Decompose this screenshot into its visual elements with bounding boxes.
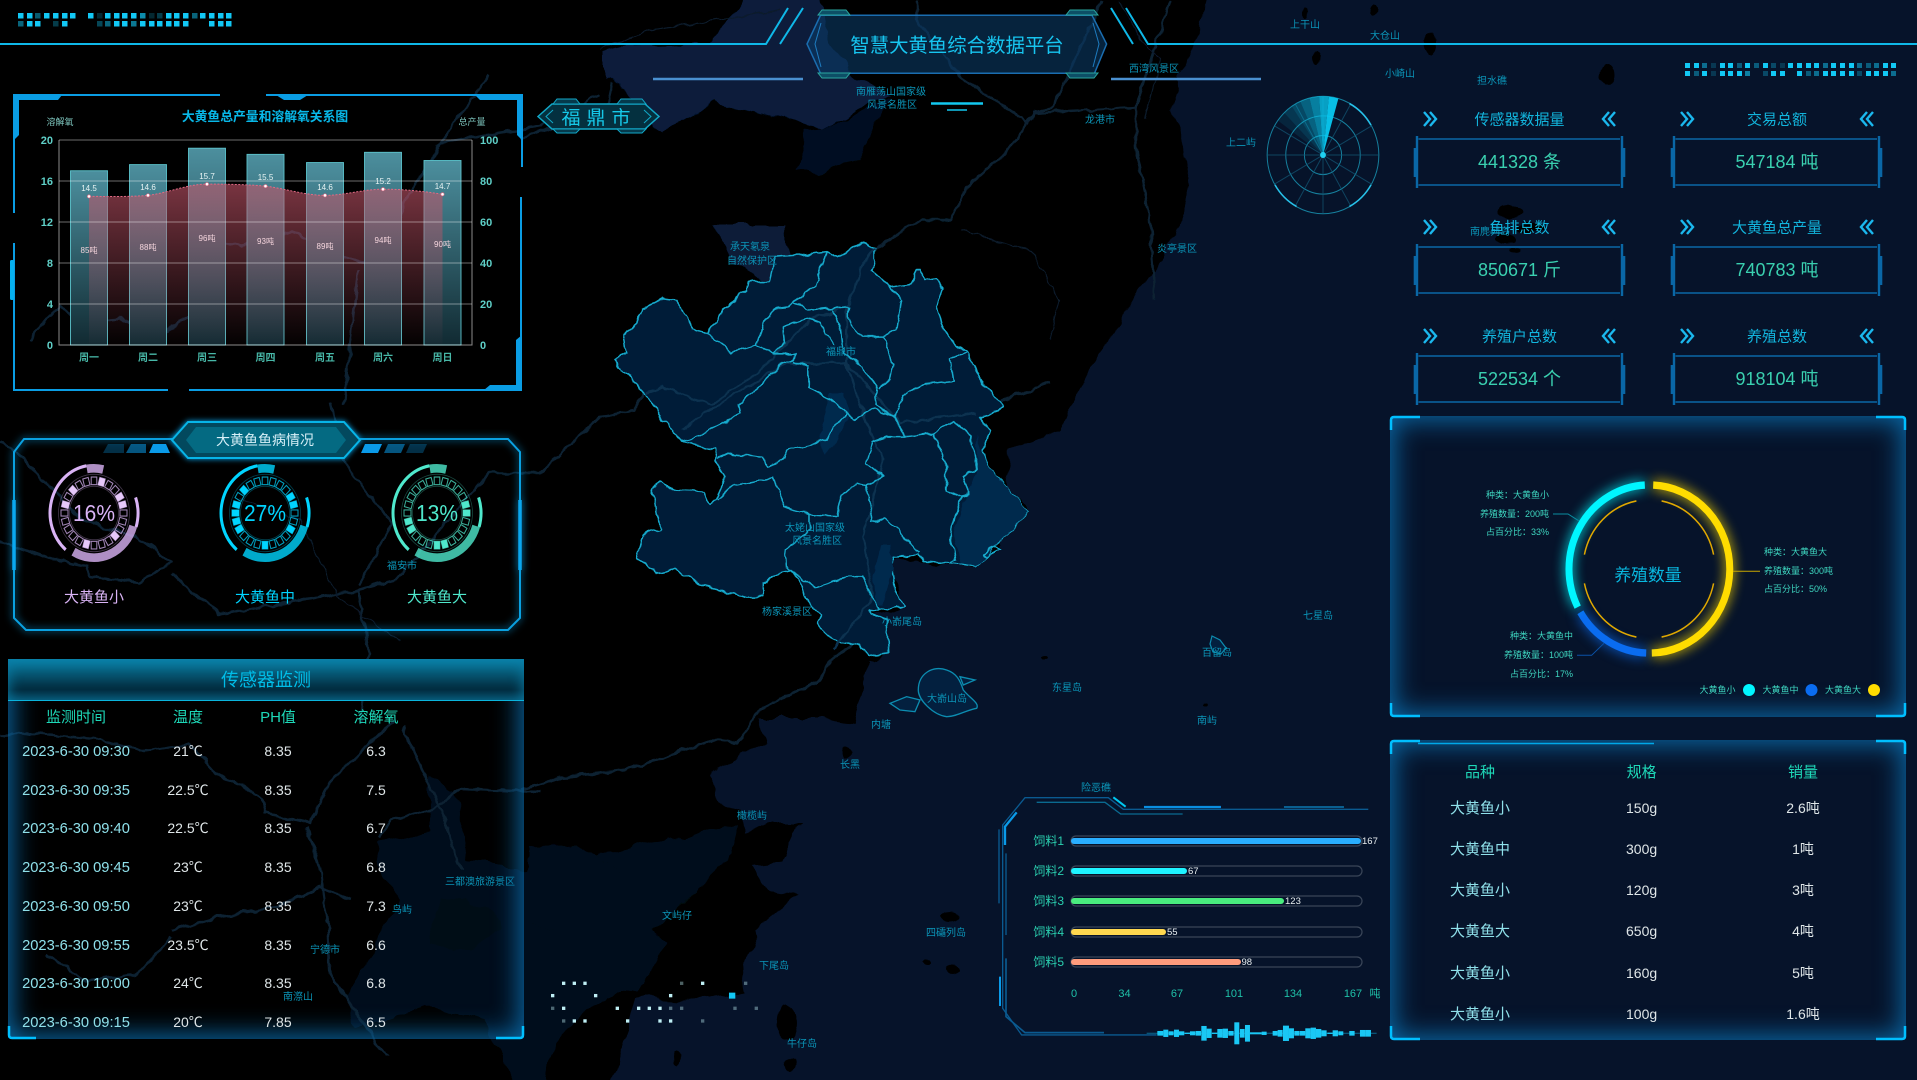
gauge: large fish 13%: 13% bbox=[416, 500, 458, 526]
data columns: 21℃ bbox=[173, 743, 203, 759]
map place labels: 牛仔岛 bbox=[787, 1037, 817, 1050]
callouts: 养殖数量：100吨 bbox=[1504, 649, 1573, 660]
left axis: 8 bbox=[47, 258, 53, 270]
data columns: 8.35 bbox=[264, 898, 292, 914]
map place labels: 四礵列岛 bbox=[926, 926, 966, 939]
bar names: 饲料1 bbox=[1033, 834, 1064, 848]
dissolved oxygen area line bbox=[87, 182, 444, 345]
card: total farmed bbox=[1672, 328, 1881, 405]
data columns: 20℃ bbox=[173, 1014, 203, 1030]
time column: 2023-6-30 09:35 bbox=[22, 783, 130, 799]
city tag: Fuding bbox=[537, 98, 660, 134]
column headers: 规格 bbox=[1627, 764, 1657, 781]
spec and sales columns: 1.6吨 bbox=[1786, 1006, 1820, 1022]
left axis: 4 bbox=[47, 299, 54, 311]
callouts: 占百分比：33% bbox=[1486, 526, 1549, 537]
day labels: 周日 bbox=[432, 352, 452, 364]
spec and sales columns bbox=[1626, 800, 1820, 1022]
map place labels: 小嵛尾岛 bbox=[882, 615, 922, 628]
map place labels: 三都澳旅游景区 bbox=[445, 875, 515, 888]
data columns: 23℃ bbox=[173, 898, 203, 914]
bar names bbox=[1033, 834, 1064, 969]
map place labels: 上干山 bbox=[1290, 19, 1320, 31]
map place labels: 东星岛 bbox=[1052, 681, 1082, 694]
leader lines bbox=[1553, 514, 1760, 655]
map place labels: 太姥山国家级 bbox=[785, 521, 845, 534]
right axis: 80 bbox=[480, 176, 492, 188]
column headers: 溶解氧 bbox=[353, 709, 399, 726]
spec and sales columns: 5吨 bbox=[1792, 965, 1814, 981]
map place labels: 西湾风景区 bbox=[1129, 62, 1179, 75]
card: total fish discharge: 850671 斤 bbox=[1478, 260, 1561, 280]
bar names: 饲料2 bbox=[1033, 864, 1064, 878]
right axis: 40 bbox=[480, 258, 492, 270]
bar tracks bbox=[1071, 836, 1362, 967]
map place labels: 担水礁 bbox=[1477, 74, 1507, 87]
panel: yield vs dissolved oxygen chart bbox=[10, 94, 523, 391]
yield value labels: 90吨 bbox=[434, 239, 451, 249]
map place labels: 宁德市 bbox=[310, 943, 340, 956]
donut chart bbox=[1569, 485, 1730, 653]
card: total farmed: 918104 吨 bbox=[1735, 369, 1819, 389]
card: total farmers: 522534 个 bbox=[1478, 369, 1561, 389]
data columns: 6.8 bbox=[366, 859, 386, 875]
day labels: 周二 bbox=[138, 352, 158, 364]
data columns: 7.3 bbox=[366, 898, 386, 914]
time column: 2023-6-30 09:40 bbox=[22, 821, 130, 837]
panel title badge: 大黄鱼鱼病情况 bbox=[216, 432, 314, 448]
yield value labels: 89吨 bbox=[317, 241, 333, 251]
variety column: 大黄鱼小 bbox=[1450, 1005, 1510, 1023]
data columns: 6.5 bbox=[366, 1014, 386, 1030]
card: sensor data volume: 441328 条 bbox=[1478, 152, 1561, 172]
time column: 2023-6-30 09:50 bbox=[22, 899, 130, 915]
day labels: 周三 bbox=[197, 352, 217, 364]
left axis: 16 bbox=[41, 176, 53, 188]
map place labels: 大仓山 bbox=[1370, 29, 1400, 42]
map place labels: 内塘 bbox=[871, 718, 891, 731]
panel: farming quantity donut bbox=[1390, 416, 1906, 717]
radar widget bbox=[1266, 96, 1380, 214]
callouts: 占百分比：17% bbox=[1510, 668, 1573, 679]
data columns: 6.8 bbox=[366, 975, 386, 991]
map place labels: 承天氡泉 bbox=[730, 240, 770, 253]
left axis: 0 bbox=[47, 340, 53, 352]
yield value labels: 88吨 bbox=[140, 242, 156, 252]
day labels: 周一 bbox=[79, 352, 99, 364]
column headers: 温度 bbox=[173, 709, 203, 726]
callouts: 种类：大黄鱼大 bbox=[1764, 546, 1827, 557]
panel: fish disease status bbox=[6, 416, 528, 638]
panel: sensor monitoring table: 传感器监测 bbox=[221, 670, 311, 690]
spec and sales columns: 4吨 bbox=[1792, 923, 1814, 939]
value axis: 0 bbox=[1071, 988, 1077, 1000]
day labels: 周六 bbox=[373, 351, 393, 364]
variety column: 大黄鱼大 bbox=[1450, 922, 1510, 940]
left axis: 20 bbox=[41, 135, 53, 147]
column headers bbox=[1465, 764, 1818, 781]
bars bbox=[1071, 838, 1361, 965]
time column bbox=[22, 744, 130, 1031]
callouts: 种类：大黄鱼小 bbox=[1486, 489, 1549, 500]
axis titles: 溶解氧 bbox=[46, 116, 74, 127]
left axis bbox=[41, 135, 54, 352]
card: total farmers: 养殖户总数 bbox=[1482, 328, 1557, 346]
value axis: 67 bbox=[1171, 988, 1183, 1000]
bar names: 饲料3 bbox=[1033, 894, 1064, 908]
value axis bbox=[1071, 987, 1380, 1000]
legend bbox=[1699, 684, 1880, 696]
bar names: 饲料4 bbox=[1033, 925, 1064, 939]
value axis: 吨 bbox=[1370, 987, 1380, 1000]
card: total yield bbox=[1672, 218, 1881, 296]
title plate bbox=[807, 10, 1107, 78]
card: total yield: 大黄鱼总产量 bbox=[1732, 218, 1822, 236]
legend: 大黄鱼大 bbox=[1825, 684, 1861, 695]
card: total transactions: 交易总额 bbox=[1747, 110, 1807, 128]
bar names: 饲料5 bbox=[1033, 955, 1064, 969]
land and sea shapes bbox=[0, 0, 1208, 1080]
gauge label: medium fish: 大黄鱼中 bbox=[235, 588, 295, 606]
map place labels: 龙港市 bbox=[1085, 113, 1115, 126]
card: total yield: 740783 吨 bbox=[1735, 260, 1819, 280]
yield value labels: 96吨 bbox=[199, 233, 215, 243]
corner marks bbox=[1391, 417, 1905, 716]
sound wave bbox=[1147, 1022, 1377, 1044]
card: sensor data volume: 传感器数据量 bbox=[1474, 112, 1565, 128]
left axis: 12 bbox=[41, 217, 53, 229]
map place labels: 南屿 bbox=[1197, 714, 1217, 727]
spec and sales columns: 300g bbox=[1626, 841, 1657, 857]
panel frame bbox=[14, 439, 520, 630]
small islands bbox=[673, 4, 1615, 1071]
map place labels: 自然保护区 bbox=[727, 254, 777, 267]
chart frame bbox=[10, 95, 522, 390]
bar values: 98 bbox=[1242, 957, 1252, 968]
gauge: medium fish 27%: 27% bbox=[244, 500, 286, 526]
oxygen value labels: 15.5 bbox=[258, 173, 274, 182]
map place labels: 长黑 bbox=[840, 759, 860, 771]
callouts: 养殖数量：300吨 bbox=[1764, 565, 1833, 576]
right axis bbox=[480, 135, 498, 352]
data columns: 7.85 bbox=[264, 1014, 292, 1030]
axis titles bbox=[46, 116, 486, 127]
data columns: 22.5℃ bbox=[167, 820, 209, 836]
data columns: 8.35 bbox=[264, 743, 292, 759]
variety column: 大黄鱼小 bbox=[1450, 964, 1510, 982]
map place labels: 福鼎市 bbox=[826, 345, 856, 358]
islands with outlines bbox=[890, 669, 977, 717]
data columns: 8.35 bbox=[264, 820, 292, 836]
day labels bbox=[79, 351, 452, 364]
map place labels bbox=[283, 19, 1510, 1050]
gauge: small fish 16% bbox=[50, 466, 138, 558]
variety column: 大黄鱼中 bbox=[1450, 840, 1510, 858]
map place labels: 文屿仔 bbox=[662, 909, 692, 922]
bar values: 67 bbox=[1188, 866, 1199, 877]
donut center label: 养殖数量 bbox=[1614, 566, 1682, 585]
spec and sales columns: 120g bbox=[1626, 882, 1657, 898]
map place labels: 百留岛 bbox=[1202, 646, 1232, 659]
data columns: 23℃ bbox=[173, 859, 203, 875]
card: total fish discharge bbox=[1415, 218, 1624, 296]
data columns: 8.35 bbox=[264, 782, 292, 798]
gauge: medium fish 27% bbox=[221, 466, 309, 558]
map place labels: 杨家溪景区 bbox=[762, 605, 812, 618]
data columns: 6.3 bbox=[366, 743, 386, 759]
day labels: 周四 bbox=[256, 352, 276, 364]
header lines bbox=[0, 8, 1917, 44]
panel: sensor monitoring table bbox=[8, 659, 524, 1039]
data columns: 24℃ bbox=[173, 975, 203, 991]
data columns: 8.35 bbox=[264, 975, 292, 991]
time column: 2023-6-30 09:45 bbox=[22, 860, 130, 876]
yield value labels: 94吨 bbox=[375, 235, 391, 245]
panel: feed bar chart bbox=[998, 796, 1380, 1044]
spec and sales columns: 2.6吨 bbox=[1786, 800, 1820, 816]
time column: 2023-6-30 10:00 bbox=[22, 976, 130, 992]
chart title: 大黄鱼总产量和溶解氧关系图 bbox=[182, 109, 348, 124]
bar values bbox=[1167, 836, 1378, 968]
corner marks bbox=[9, 1026, 523, 1038]
map place labels: 南漈山 bbox=[283, 990, 313, 1003]
map place labels: 小崎山 bbox=[1385, 67, 1415, 80]
oxygen value labels: 15.2 bbox=[375, 177, 391, 186]
card: total fish discharge: 鱼排总数 bbox=[1489, 218, 1550, 236]
bars bbox=[70, 148, 461, 345]
data columns: 6.6 bbox=[366, 937, 386, 953]
grid and axes bbox=[59, 140, 472, 345]
spec and sales columns: 100g bbox=[1626, 1006, 1657, 1022]
map: Fuding city districts bbox=[615, 242, 1028, 657]
map place labels: 炎亭景区 bbox=[1157, 242, 1197, 255]
map place labels: 南麂列岛 bbox=[1470, 225, 1510, 238]
axis titles: 总产量 bbox=[458, 116, 486, 127]
right axis: 20 bbox=[480, 299, 492, 311]
column headers: 品种 bbox=[1465, 764, 1495, 781]
data columns: 22.5℃ bbox=[167, 782, 209, 798]
card: sensor data volume bbox=[1415, 112, 1624, 188]
map place labels: 险恶礁 bbox=[1081, 781, 1111, 794]
yield value labels: 93吨 bbox=[257, 236, 274, 246]
gauge: large fish 13% bbox=[393, 466, 481, 558]
panel title badge bbox=[103, 422, 427, 458]
panel: variety and sales table bbox=[1390, 740, 1906, 1040]
map place labels: 上二屿 bbox=[1226, 137, 1256, 149]
time column: 2023-6-30 09:15 bbox=[22, 1015, 130, 1031]
bar values: 55 bbox=[1167, 927, 1178, 938]
map place labels: 大嵛山岛 bbox=[927, 692, 967, 705]
day labels: 周五 bbox=[315, 352, 335, 364]
card: total transactions: 547184 吨 bbox=[1735, 152, 1819, 172]
value axis: 34 bbox=[1118, 988, 1131, 1000]
value axis: 101 bbox=[1225, 988, 1243, 1000]
decorative dots top left bbox=[18, 13, 232, 26]
legend: 大黄鱼小 bbox=[1699, 684, 1736, 695]
variety column: 大黄鱼小 bbox=[1450, 799, 1510, 817]
oxygen value labels: 14.5 bbox=[81, 184, 97, 193]
spec and sales columns: 650g bbox=[1626, 923, 1657, 939]
bar values: 123 bbox=[1285, 896, 1301, 907]
oxygen value labels: 14.6 bbox=[317, 183, 333, 192]
callouts: 种类：大黄鱼中 bbox=[1510, 630, 1573, 641]
map place labels: 橄榄屿 bbox=[737, 809, 767, 822]
card: total transactions bbox=[1672, 110, 1881, 188]
column headers: 销量 bbox=[1788, 764, 1818, 781]
bar values: 167 bbox=[1362, 836, 1378, 847]
data columns: 8.35 bbox=[264, 859, 292, 875]
yield value labels bbox=[81, 233, 451, 255]
callouts: 养殖数量：200吨 bbox=[1480, 508, 1549, 519]
time column: 2023-6-30 09:30 bbox=[22, 744, 130, 760]
corner marks bbox=[1391, 741, 1905, 1039]
oxygen value labels bbox=[81, 172, 451, 193]
right axis: 60 bbox=[480, 217, 492, 229]
map place labels: 福安市 bbox=[387, 559, 417, 572]
column headers bbox=[46, 709, 399, 726]
card: total farmed: 养殖总数 bbox=[1747, 328, 1807, 346]
column headers: 监测时间 bbox=[46, 709, 106, 726]
callouts: 占百分比：50% bbox=[1764, 583, 1827, 594]
oxygen value labels: 14.7 bbox=[435, 182, 451, 191]
spec and sales columns: 3吨 bbox=[1792, 882, 1814, 898]
value axis: 134 bbox=[1284, 988, 1302, 1000]
value axis: 167 bbox=[1344, 988, 1362, 1000]
spec and sales columns: 150g bbox=[1626, 800, 1657, 816]
data columns: 7.5 bbox=[366, 782, 386, 798]
title: 智慧大黄鱼综合数据平台 bbox=[850, 35, 1064, 57]
table heading bar bbox=[8, 659, 524, 701]
variety column bbox=[1450, 799, 1510, 1023]
tech frame bbox=[999, 797, 1368, 1035]
map place labels: 鸟屿 bbox=[392, 903, 412, 916]
time column: 2023-6-30 09:55 bbox=[22, 938, 130, 954]
gauge: small fish 16%: 16% bbox=[73, 500, 115, 526]
data dots bbox=[551, 982, 758, 1023]
road network bbox=[0, 0, 1170, 1057]
oxygen value labels: 15.7 bbox=[199, 172, 215, 181]
right axis: 0 bbox=[480, 340, 486, 352]
gauge label: small fish: 大黄鱼小 bbox=[64, 588, 124, 606]
data columns bbox=[167, 743, 386, 1030]
map place labels: 风景名胜区 bbox=[792, 534, 842, 547]
card: total farmers bbox=[1415, 328, 1624, 405]
callouts bbox=[1480, 489, 1833, 679]
city tag: Fuding: 福鼎市 bbox=[561, 107, 637, 129]
spec and sales columns: 1吨 bbox=[1792, 841, 1814, 857]
panel: KPI cards bbox=[1414, 110, 1882, 405]
map place labels: 风景名胜区 bbox=[867, 98, 917, 111]
map place labels: 南雁荡山国家级 bbox=[856, 85, 926, 98]
map place labels: 七星岛 bbox=[1303, 609, 1333, 622]
map place labels: 下尾岛 bbox=[759, 959, 789, 972]
spec and sales columns: 160g bbox=[1626, 965, 1657, 981]
right axis: 100 bbox=[480, 135, 498, 147]
legend: 大黄鱼中 bbox=[1762, 684, 1798, 695]
yield value labels: 85吨 bbox=[81, 245, 97, 255]
decorative dots top right bbox=[1685, 63, 1896, 76]
oxygen value labels: 14.6 bbox=[140, 183, 156, 192]
data columns: 6.7 bbox=[366, 820, 386, 836]
data columns: 8.35 bbox=[264, 937, 292, 953]
variety column: 大黄鱼小 bbox=[1450, 881, 1510, 899]
data columns: 23.5℃ bbox=[167, 937, 209, 953]
gauge label: large fish: 大黄鱼大 bbox=[407, 588, 467, 606]
column headers: PH值 bbox=[260, 709, 296, 726]
